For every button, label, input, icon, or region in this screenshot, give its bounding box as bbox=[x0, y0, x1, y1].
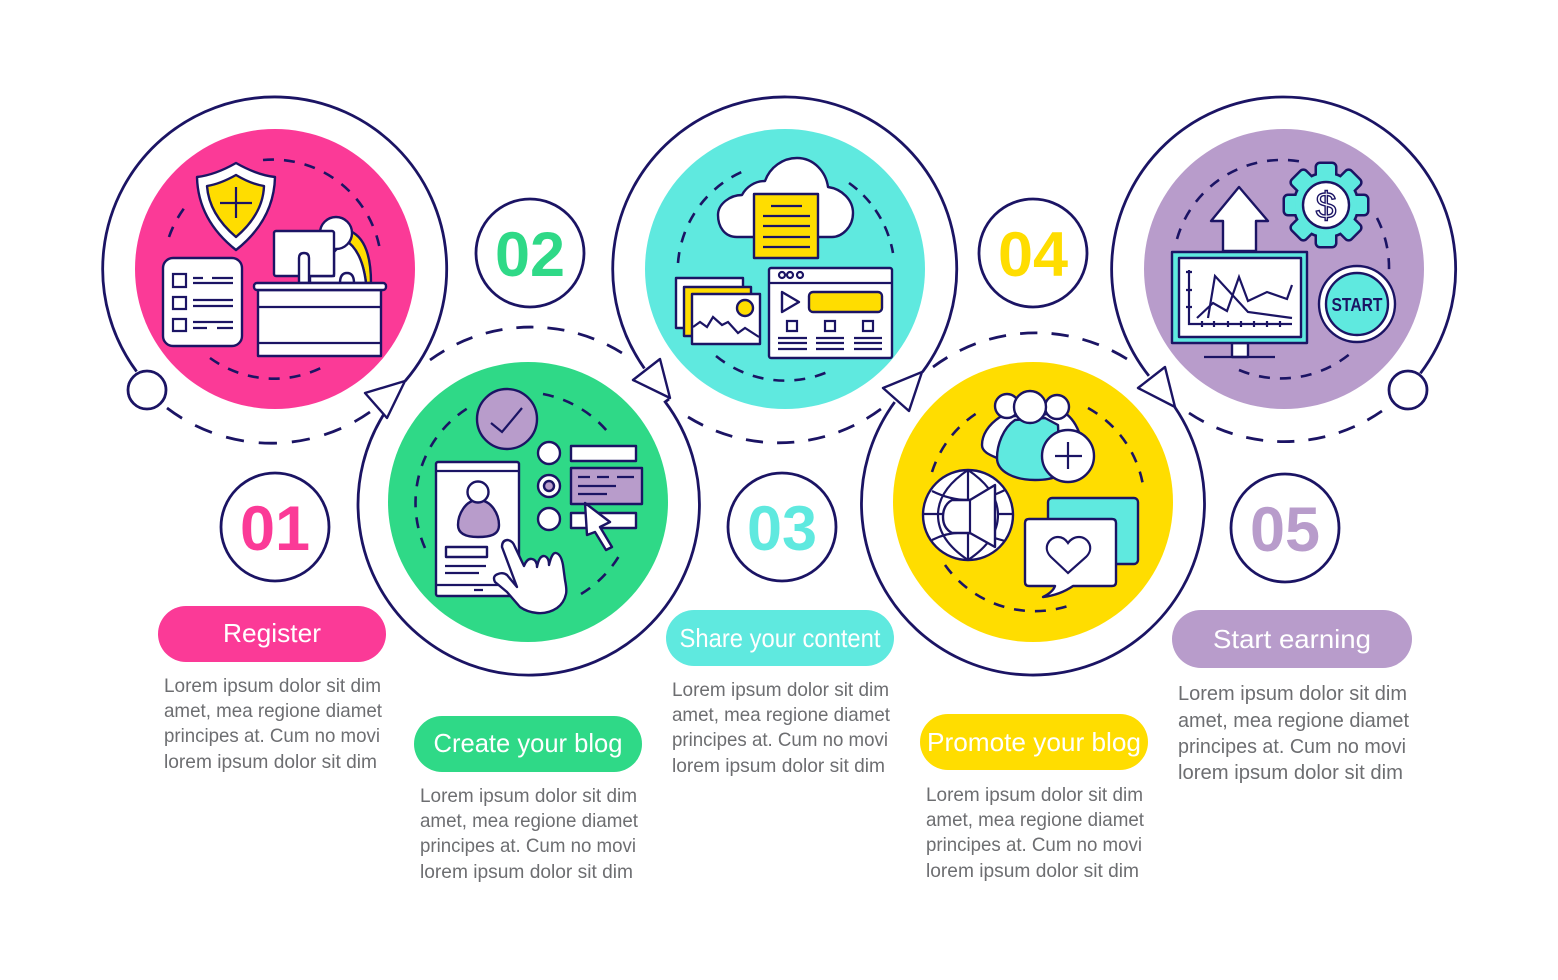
text: create description: amet, mea regione diamet bbox=[420, 810, 639, 832]
panel: step 4 promote your blog bbox=[861, 333, 1204, 675]
icon: chart monitor bbox=[1172, 252, 1307, 357]
number 05 bbox=[1231, 474, 1339, 582]
icon: reception desk bbox=[254, 217, 386, 356]
dashed connector 5 bbox=[1189, 411, 1382, 442]
label: create your blog: Create your blog bbox=[434, 728, 622, 758]
label: create your blog bbox=[414, 716, 642, 772]
icon: dollar gear bbox=[1285, 164, 1367, 246]
outer ring 2 bbox=[358, 399, 699, 675]
label: start earning: Start earning bbox=[1213, 624, 1371, 654]
label: register bbox=[158, 606, 386, 662]
text: promote description: lorem ipsum dolor sit dim bbox=[926, 860, 1139, 882]
arrow: connector 2 bbox=[633, 359, 670, 398]
icon: tablet profile bbox=[436, 462, 519, 596]
text: register description: lorem ipsum dolor sit dim bbox=[164, 751, 377, 773]
icon: check badge bbox=[477, 389, 537, 449]
icon: form list bbox=[163, 258, 242, 346]
number 05: 05 bbox=[1250, 495, 1320, 565]
text: create description bbox=[420, 785, 639, 883]
inner dashed ring 4 bbox=[932, 408, 1143, 611]
green disc bbox=[388, 362, 668, 642]
number 01 bbox=[221, 473, 329, 581]
number 02: 02 bbox=[495, 220, 565, 290]
number 03: 03 bbox=[747, 494, 817, 564]
outer ring 3 bbox=[613, 97, 957, 372]
text: promote description bbox=[926, 784, 1145, 882]
outer ring 4 bbox=[861, 402, 1204, 675]
text: start earning description: amet, mea regione diamet bbox=[1178, 709, 1409, 732]
text: promote description: amet, mea regione diamet bbox=[926, 809, 1145, 831]
text: create description: lorem ipsum dolor sit dim bbox=[420, 861, 633, 883]
label: register: Register bbox=[223, 618, 321, 648]
outer ring 1 bbox=[103, 97, 447, 381]
icon: shield bbox=[197, 163, 275, 250]
cyan disc bbox=[645, 129, 925, 409]
text: register description: principes at. Cum no movi bbox=[164, 725, 380, 747]
label: share your content bbox=[666, 610, 894, 666]
label: promote your blog bbox=[920, 714, 1148, 770]
dashed connector 2 bbox=[430, 327, 622, 360]
icon: dollar gear: $ bbox=[1316, 185, 1336, 226]
icon: start button: START bbox=[1332, 294, 1383, 315]
number 04: 04 bbox=[998, 220, 1068, 290]
number 04 bbox=[979, 199, 1087, 307]
panel: step 1 register bbox=[103, 97, 447, 443]
text: share description: amet, mea regione diamet bbox=[672, 704, 891, 726]
text: share description: principes at. Cum no movi bbox=[672, 729, 888, 751]
text: create description: principes at. Cum no movi bbox=[420, 835, 636, 857]
dashed connector 3 bbox=[688, 409, 881, 443]
arrow: connector 1 bbox=[365, 381, 405, 418]
text: promote description: Lorem ipsum dolor sit dim bbox=[926, 784, 1143, 806]
text: create description: Lorem ipsum dolor sit dim bbox=[420, 785, 637, 807]
yellow disc bbox=[893, 362, 1173, 642]
icon: cloud document bbox=[718, 158, 853, 258]
text: start earning description: lorem ipsum dolor sit dim bbox=[1178, 761, 1403, 784]
dashed connector 1 bbox=[167, 408, 370, 443]
icon: browser video bbox=[769, 268, 892, 358]
text: share description: lorem ipsum dolor sit dim bbox=[672, 755, 885, 777]
inner dashed ring 1 bbox=[169, 160, 380, 379]
end node bbox=[1389, 371, 1427, 409]
arrow: connector 4 bbox=[1138, 367, 1175, 407]
inner dashed ring 2 bbox=[416, 394, 619, 594]
panel: step 5 start earning bbox=[1112, 97, 1456, 442]
icon: pointing hand bbox=[494, 540, 566, 613]
panel: step 2 create your blog bbox=[358, 327, 699, 675]
text: promote description: principes at. Cum no movi bbox=[926, 834, 1142, 856]
text: start earning description bbox=[1178, 682, 1409, 784]
number 01: 01 bbox=[240, 494, 310, 564]
icon: audience with plus bbox=[982, 391, 1094, 482]
text: start earning description: Lorem ipsum dolor sit dim bbox=[1178, 682, 1407, 705]
text: register description: amet, mea regione diamet bbox=[164, 700, 383, 722]
label: share your content: Share your content bbox=[680, 623, 881, 653]
dashed connector 4 bbox=[933, 333, 1127, 367]
number 03 bbox=[728, 473, 836, 581]
icon: radio options bbox=[538, 442, 642, 530]
icon: globe megaphone bbox=[923, 470, 1013, 560]
text: register description: Lorem ipsum dolor sit dim bbox=[164, 675, 381, 697]
inner dashed ring 5 bbox=[1177, 160, 1389, 378]
pink disc bbox=[135, 129, 415, 409]
text: share description: Lorem ipsum dolor sit dim bbox=[672, 679, 889, 701]
icon: cursor bbox=[585, 503, 612, 550]
text: start earning description: principes at. Cum no movi bbox=[1178, 735, 1406, 758]
icon: chat heart bbox=[1025, 498, 1138, 597]
panel: step 3 share your content bbox=[613, 97, 957, 443]
outer ring 5 bbox=[1112, 97, 1456, 376]
label: promote your blog: Promote your blog bbox=[927, 727, 1141, 757]
inner dashed ring 3 bbox=[678, 169, 893, 381]
number 02 bbox=[476, 199, 584, 307]
start node bbox=[128, 371, 166, 409]
icon: start button bbox=[1319, 266, 1395, 342]
arrow: connector 3 bbox=[883, 372, 922, 411]
text: register description bbox=[164, 675, 383, 773]
text: share description bbox=[672, 679, 891, 777]
purple disc bbox=[1144, 129, 1424, 409]
icon: photo stack bbox=[676, 278, 760, 344]
icon: up arrow bbox=[1211, 187, 1268, 251]
label: start earning bbox=[1172, 610, 1412, 668]
